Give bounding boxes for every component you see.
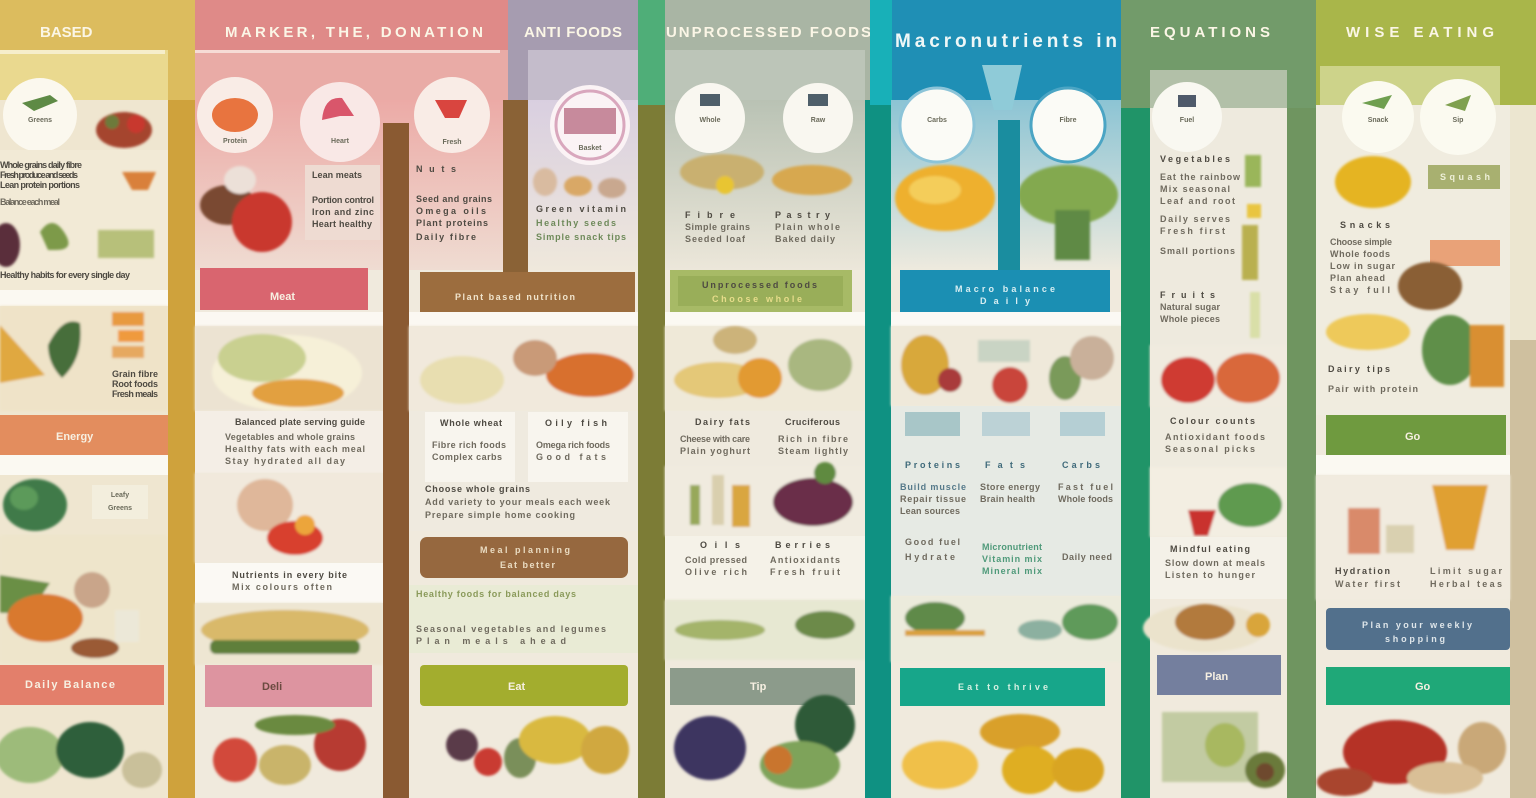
icon circle	[1031, 88, 1105, 162]
panel: three columns of text: Repair tissue	[900, 494, 966, 504]
text block: Eat the rainbow	[1160, 172, 1241, 182]
panel: three columns of text: Store energy	[980, 482, 1040, 492]
text block: Fresh first	[1160, 226, 1225, 236]
food: pasta and salmon	[409, 326, 638, 411]
orange band	[0, 415, 168, 455]
strip: teal	[865, 100, 891, 798]
panel: three columns of text: Fast fuel	[1058, 482, 1113, 492]
text block: Fresh fruit	[770, 567, 840, 577]
text block	[195, 411, 383, 473]
text block: Healthy habits for every single day	[0, 270, 130, 280]
text lines: Pair with protein	[1328, 384, 1418, 394]
food: greens row	[891, 596, 1121, 662]
panel: column 1	[0, 0, 195, 798]
text block: Cruciferous	[785, 417, 840, 427]
text block: Nutrients in every bite	[232, 570, 347, 580]
food: greens row	[665, 600, 865, 660]
label box: Squash	[1440, 172, 1490, 182]
green band: Go	[1405, 431, 1421, 443]
panel: three columns of text: Build muscle	[900, 482, 966, 492]
food: peach and pepper	[195, 473, 383, 563]
text block: Oils	[700, 540, 740, 550]
header band 7: WISE EATING	[1346, 24, 1494, 41]
text block	[665, 536, 865, 600]
green band: Go	[1415, 681, 1431, 693]
text lines: Healthy seeds	[536, 218, 616, 228]
food: pasta	[895, 165, 995, 231]
food: avocado	[1162, 712, 1285, 788]
text block	[0, 150, 168, 290]
text lines	[112, 369, 158, 399]
text block: Stay full	[1330, 285, 1390, 295]
text block: Seeded loaf	[685, 234, 746, 244]
right edge strip	[1510, 105, 1536, 798]
header band 3: ANTI FOODS	[524, 24, 622, 41]
text block: Prepare simple home cooking	[425, 510, 575, 520]
icon circle	[550, 85, 630, 165]
text block: Stay hydrated all day	[225, 456, 345, 466]
brown band: Eat better	[500, 560, 555, 570]
food: mixed vegetables	[446, 716, 629, 778]
icon circle: Snack	[1368, 117, 1388, 124]
strip: olive	[638, 105, 665, 798]
text block: Balance each meal	[0, 197, 60, 207]
panel: column 7	[1316, 0, 1536, 798]
icon circle: Raw	[811, 117, 826, 124]
text lines	[1335, 566, 1502, 589]
text block: Low in sugar	[1330, 261, 1395, 271]
food: drinks	[1316, 475, 1510, 600]
text block: Healthy foods for balanced days	[416, 589, 576, 599]
text lines: Fresh meals	[112, 389, 158, 399]
food: potato	[1398, 262, 1462, 310]
pink band: Deli	[262, 681, 282, 693]
header band 5: Macronutrients in	[895, 31, 1117, 52]
blue band: Daily	[980, 296, 1030, 306]
food: vegetables	[213, 715, 366, 785]
icon: funnel	[982, 65, 1022, 110]
food: broccoli	[1018, 165, 1118, 260]
brown band: Meal planning	[480, 545, 570, 555]
panel: three columns of text: Daily need	[1062, 552, 1112, 562]
food: bread and corn	[680, 154, 852, 195]
text block: Oily fish	[545, 418, 607, 428]
food: bottles and grapes	[665, 462, 865, 536]
text block: Snacks	[1340, 220, 1390, 230]
text lines: Herbal teas	[1430, 579, 1502, 589]
text block: Good fats	[536, 452, 606, 462]
text block: Portion control	[312, 195, 374, 205]
text block: Natural sugar	[1160, 302, 1220, 312]
panel: three columns of text: Good fuel	[905, 537, 960, 547]
panel: column 4	[665, 0, 871, 789]
icon circle: Fuel	[1180, 117, 1194, 124]
text block: Whole wheat	[440, 418, 502, 428]
header band 3	[508, 0, 638, 100]
salmon band: Daily Balance	[25, 679, 115, 691]
teal band: Eat to thrive	[958, 682, 1048, 692]
panel: three columns of text: Whole foods	[1058, 494, 1113, 504]
food: yellow squash	[1335, 156, 1411, 208]
text block: Plain whole	[775, 222, 840, 232]
header band 4	[665, 0, 871, 100]
icon circle	[197, 77, 273, 153]
text block: Whole grains daily fibre	[0, 160, 82, 170]
text lines: Hydration	[1335, 566, 1390, 576]
text block: Daily serves	[1160, 214, 1230, 224]
header band 2	[195, 0, 508, 100]
text lines	[536, 204, 626, 242]
panel: three columns of text: Lean sources	[900, 506, 960, 516]
text lines: Dairy tips	[1328, 364, 1390, 374]
text block: Mindful eating	[1170, 544, 1250, 554]
text block: Small portions	[1160, 246, 1235, 256]
icon circle	[3, 78, 77, 152]
food: sandwich	[195, 603, 383, 665]
text lines: Simple snack tips	[536, 232, 626, 242]
text block: Pastry	[775, 210, 830, 220]
header accent: green	[638, 0, 665, 105]
text block: Balanced plate serving guide	[235, 417, 365, 427]
strip: gold	[168, 100, 195, 798]
text block: Antioxidants	[770, 555, 840, 565]
slate band: Plan	[1205, 671, 1229, 683]
panel: three columns of text: Micronutrient	[982, 542, 1042, 552]
panel: three columns of text: Carbs	[1062, 460, 1100, 470]
text block: Leaf and root	[1160, 196, 1235, 206]
grey band: Tip	[750, 681, 767, 693]
green band	[1326, 415, 1506, 455]
text lines: Root foods	[112, 379, 158, 389]
text block: Whole foods	[1330, 249, 1390, 259]
pink band	[200, 268, 368, 310]
text block: Lean protein portions	[0, 180, 80, 190]
bottles column	[1242, 155, 1261, 338]
food: berries and salad	[1150, 467, 1287, 537]
olive band: Eat	[508, 681, 525, 693]
panel: three columns of text: Proteins	[905, 460, 960, 470]
label box	[1428, 165, 1500, 189]
text block: Olive rich	[685, 567, 747, 577]
panel: three columns of text: Mineral mix	[982, 566, 1042, 576]
text block	[409, 411, 638, 531]
icon circle	[900, 88, 974, 162]
text block: Colour counts	[1170, 416, 1255, 426]
text block	[1150, 407, 1287, 467]
text block: Plan ahead	[1330, 273, 1385, 283]
text block: Whole pieces	[1160, 314, 1220, 324]
header band 7	[1316, 0, 1536, 106]
text block: Fibre rich foods	[432, 440, 506, 450]
text block: Daily fibre	[416, 232, 476, 242]
text lines: Green vitamin	[536, 204, 626, 214]
text lines: Limit sugar	[1430, 566, 1502, 576]
food: yellow pile	[902, 714, 1104, 794]
food: greens	[0, 722, 162, 788]
icon circle	[414, 77, 490, 153]
text block: Rich in fibre	[778, 434, 848, 444]
icon circle: Fresh	[442, 139, 462, 146]
header band 1	[0, 0, 195, 100]
panel: column 3	[409, 0, 638, 778]
header band 5	[870, 0, 1121, 105]
icon circle	[1420, 79, 1496, 155]
green band	[1326, 667, 1510, 705]
text block: Mix seasonal	[1160, 184, 1230, 194]
green band: Unprocessed foods	[702, 280, 817, 290]
text block: Seed and grains	[416, 194, 492, 204]
food: meat and tomato	[200, 166, 292, 252]
text block: Vegetables	[1160, 154, 1230, 164]
header band 1: BASED	[40, 24, 93, 41]
text block: Complex carbs	[432, 452, 502, 462]
text block: Listen to hunger	[1165, 570, 1255, 580]
text block	[416, 164, 492, 242]
panel: column 5	[870, 0, 1121, 794]
text block: Iron and zinc	[312, 207, 374, 217]
teal stem	[998, 120, 1020, 272]
slate band	[1157, 655, 1281, 695]
header band 6: EQUATIONS	[1150, 24, 1270, 41]
food: cheese and greens	[1326, 314, 1504, 387]
brown band: Plant based nutrition	[455, 292, 575, 302]
icon circle: Fibre	[1059, 117, 1077, 124]
food: plate	[0, 535, 168, 663]
strip: green	[1287, 108, 1316, 798]
text block: Plan meals ahead	[416, 636, 566, 646]
food icons	[0, 172, 156, 267]
panel: column 2	[195, 0, 508, 785]
blue band: Macro balance	[955, 284, 1055, 294]
text block: Lean meats	[312, 170, 362, 180]
text block	[1150, 537, 1287, 599]
blue band	[900, 270, 1110, 312]
header band 6	[1121, 0, 1316, 110]
grey band	[670, 668, 855, 705]
food: orange tag	[1430, 240, 1500, 266]
panel: three columns of text	[891, 406, 1121, 596]
pink band	[205, 665, 372, 707]
slate band: Plan your weekly	[1362, 620, 1472, 630]
panel: three columns of text: Brain health	[980, 494, 1035, 504]
icon circle	[1342, 81, 1414, 153]
text block	[409, 585, 638, 653]
text block: Cheese with care	[680, 434, 750, 444]
text block	[685, 210, 840, 244]
text block: Vegetables and whole grains	[225, 432, 355, 442]
panel: column 6	[1121, 0, 1316, 788]
salmon band	[0, 665, 164, 705]
text block: Cold pressed	[685, 555, 747, 565]
food row	[0, 306, 168, 411]
food: berries	[96, 112, 152, 148]
orange band: Energy	[56, 431, 94, 443]
icon circle: Carbs	[927, 117, 947, 124]
icon circle: Protein	[223, 138, 247, 145]
icon circle	[1152, 82, 1222, 152]
icon circle	[300, 82, 380, 162]
text block: Fibre	[685, 210, 735, 220]
text block: Fresh produce and seeds	[0, 170, 78, 180]
olive band	[420, 665, 628, 706]
text block	[195, 563, 383, 603]
panel: three columns of text: Vitamin mix	[982, 554, 1042, 564]
icon circle: Greens	[28, 117, 52, 124]
pink band: Meat	[270, 291, 295, 303]
text block: Omega oils	[416, 206, 486, 216]
green band	[670, 270, 852, 312]
text lines	[1328, 364, 1418, 394]
text block	[1330, 220, 1395, 295]
food row	[891, 326, 1121, 406]
text block: Heart healthy	[312, 219, 372, 229]
food: plate	[195, 326, 383, 411]
strip: brown	[383, 123, 409, 798]
brown stem	[503, 100, 528, 272]
food: tomatoes	[1150, 345, 1287, 407]
icon circle	[783, 83, 853, 153]
text lines: Water first	[1335, 579, 1400, 589]
text block: Choose whole grains	[425, 484, 530, 494]
icon circle: Heart	[331, 138, 350, 145]
text block: Dairy fats	[695, 417, 750, 427]
icon circle: Sip	[1453, 117, 1463, 124]
label: Greens	[108, 505, 132, 512]
brown band	[420, 537, 628, 578]
food: plate	[1143, 604, 1270, 652]
food: cheese and cauliflower	[665, 326, 865, 411]
panel: three columns of text: Fats	[985, 460, 1025, 470]
panel: three columns of text: Hydrate	[905, 552, 955, 562]
label	[92, 485, 148, 519]
strip: green	[1121, 105, 1150, 798]
text block: Berries	[775, 540, 830, 550]
label: Leafy	[111, 492, 129, 499]
text block: Plant proteins	[416, 218, 488, 228]
text block	[1160, 154, 1241, 324]
white divider band	[0, 290, 168, 306]
text block: Antioxidant foods	[1165, 432, 1265, 442]
slate band: shopping	[1385, 634, 1445, 644]
icon circle	[675, 83, 745, 153]
food: leafy green	[3, 479, 67, 531]
text block: Seasonal picks	[1165, 444, 1255, 454]
text block	[665, 411, 865, 466]
header band 2: MARKER, THE, DONATION	[225, 24, 483, 41]
text block: Seasonal vegetables and legumes	[416, 624, 606, 634]
text block: Simple grains	[685, 222, 750, 232]
slate band	[1326, 608, 1510, 650]
text block: Mix colours often	[232, 582, 332, 592]
icon circle: Whole	[700, 117, 721, 124]
text block: Omega rich foods	[536, 440, 610, 450]
text block: Nuts	[416, 164, 456, 174]
header band 4: UNPROCESSED FOODS	[666, 24, 871, 41]
teal band	[900, 668, 1105, 706]
food: red meat and bread	[1317, 720, 1506, 796]
text block: Slow down at meals	[1165, 558, 1265, 568]
text block: Plain yoghurt	[680, 446, 750, 456]
text block: Fruits	[1160, 290, 1215, 300]
text block: Add variety to your meals each week	[425, 497, 611, 507]
text block: Choose simple	[1330, 237, 1392, 247]
food: eggplant and greens	[674, 695, 855, 789]
text lines: Grain fibre	[112, 369, 158, 379]
text block: Baked daily	[775, 234, 835, 244]
text block	[305, 165, 380, 240]
food: nuts	[533, 168, 626, 198]
text block: Healthy fats with each meal	[225, 444, 365, 454]
icon circle: Basket	[579, 145, 602, 152]
green band: Choose whole	[712, 294, 802, 304]
text block: Steam lightly	[778, 446, 848, 456]
brown band	[420, 272, 635, 312]
